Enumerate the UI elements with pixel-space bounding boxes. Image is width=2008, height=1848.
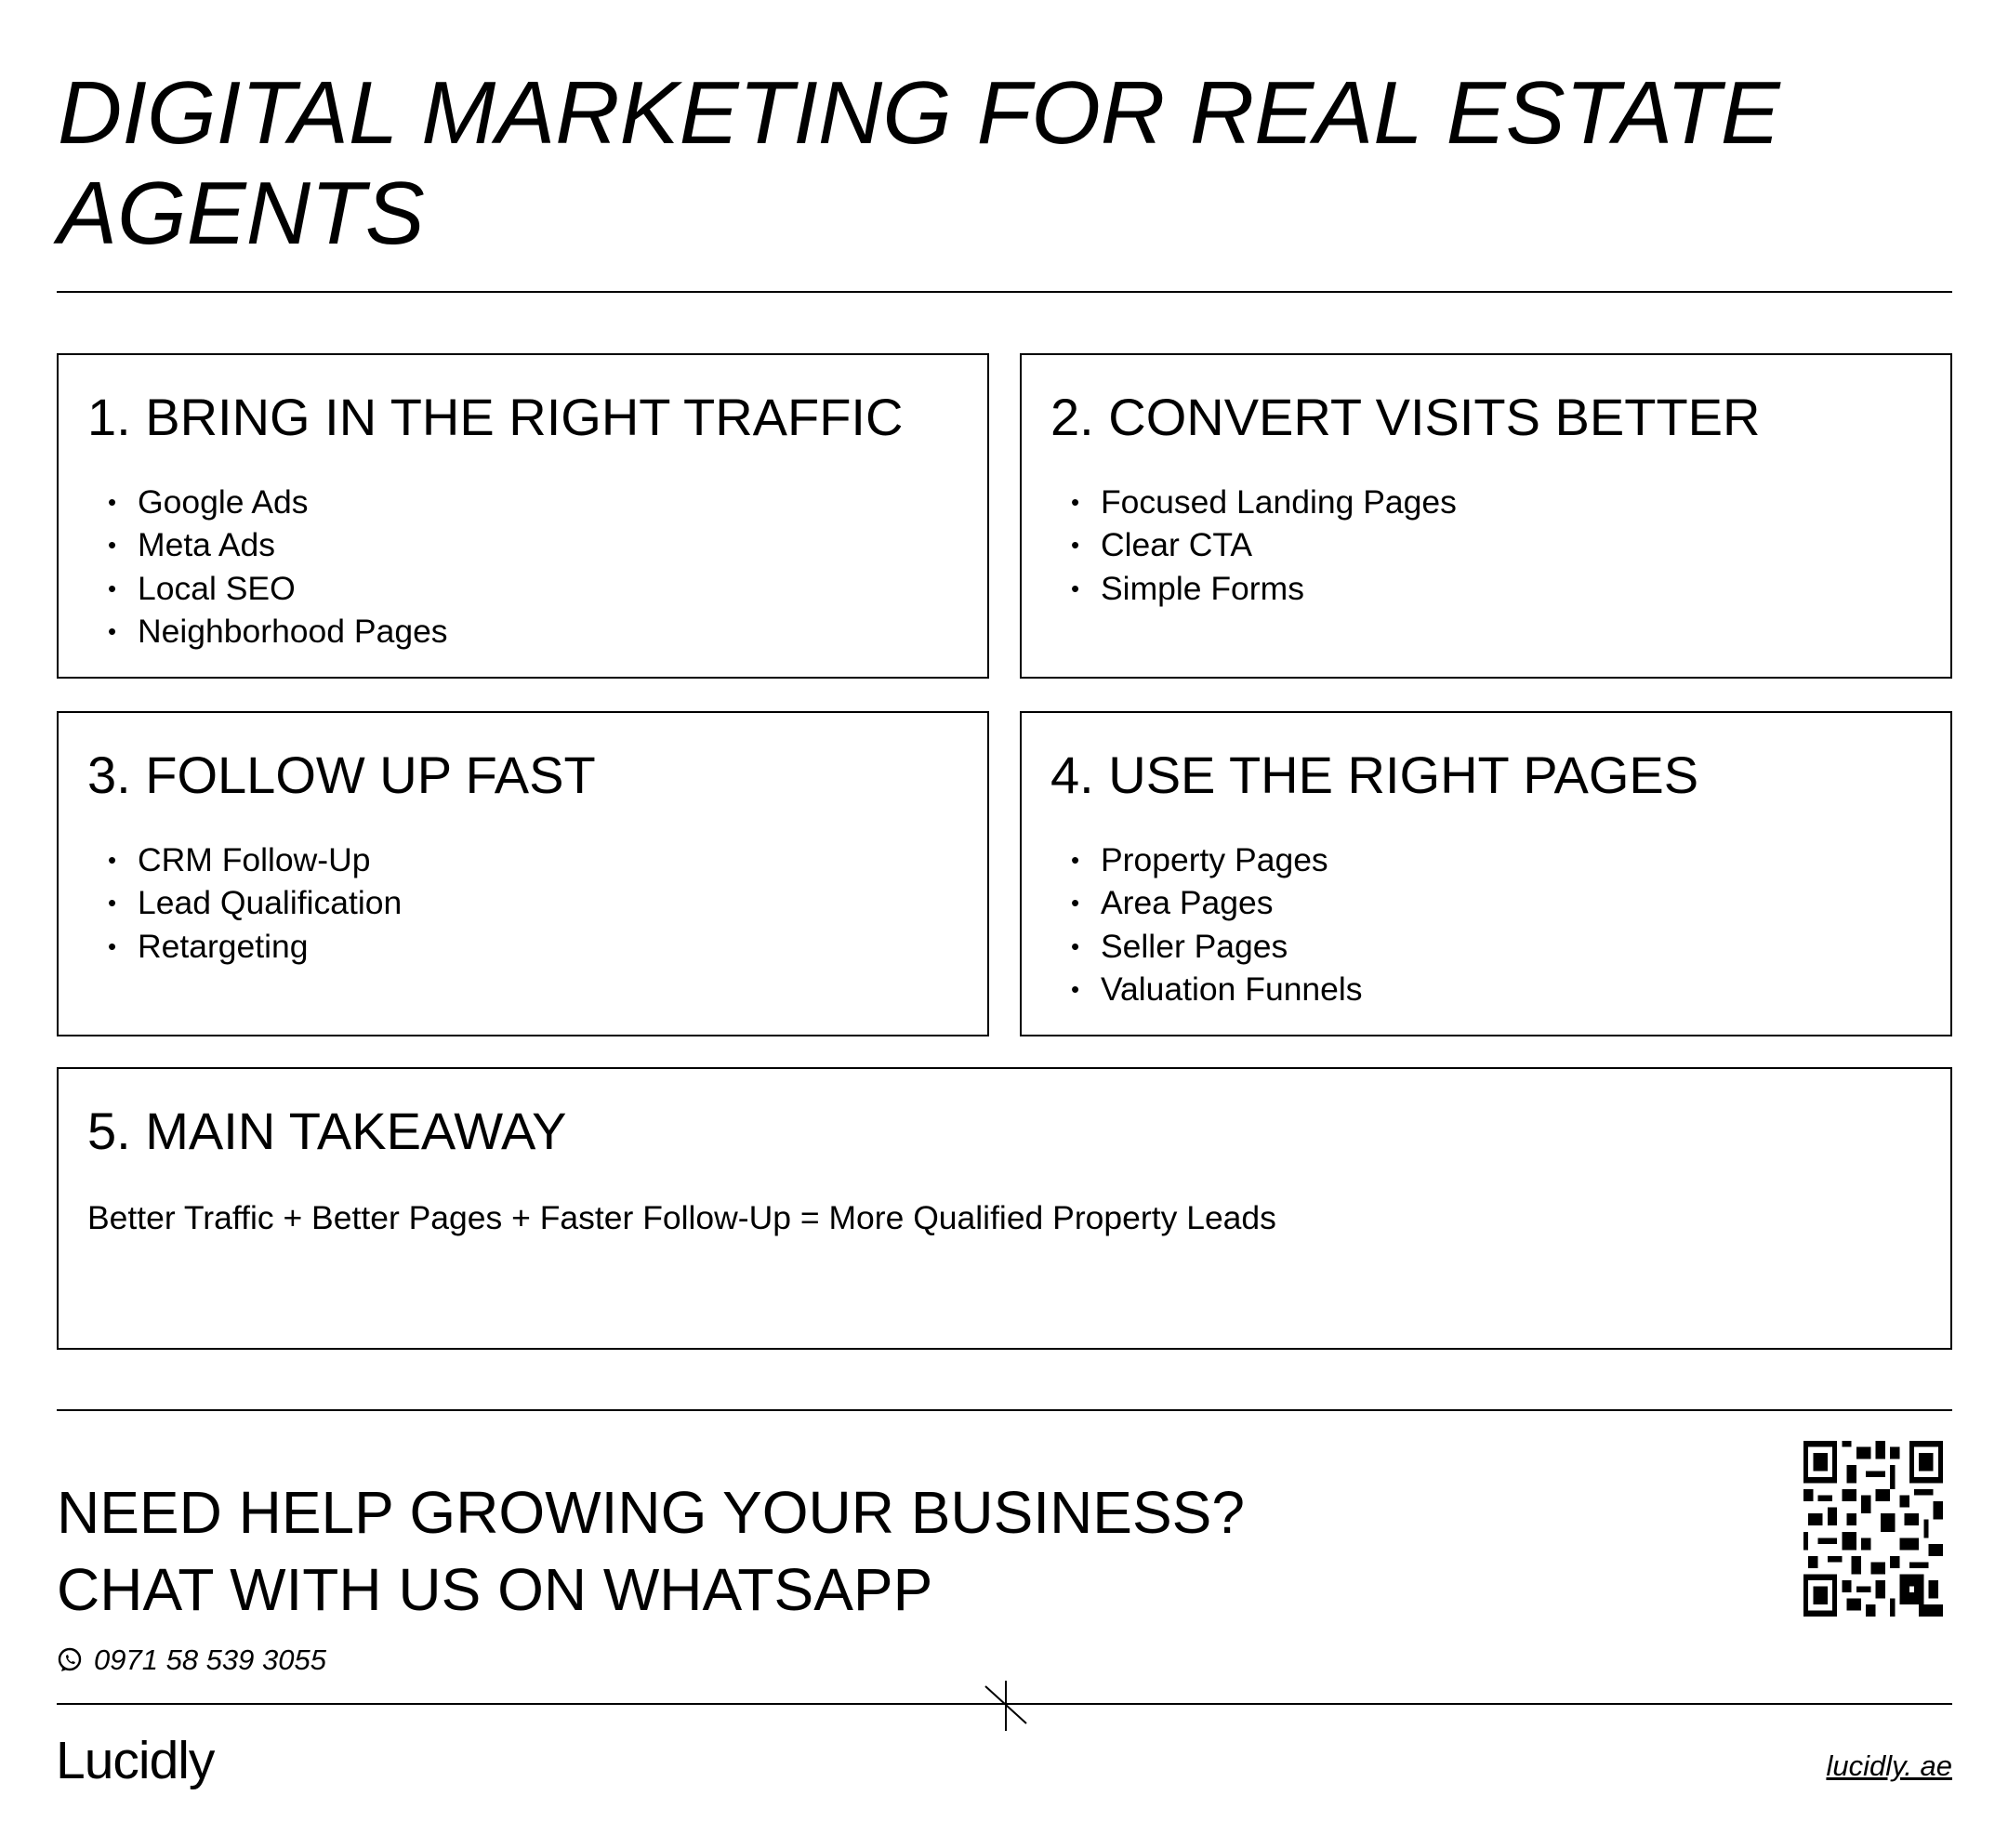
qr code: [1803, 1441, 1943, 1617]
logo: Lucidly: Lucidly: [56, 1731, 214, 1790]
heading 2: 2. CONVERT VISITS BETTER: [1050, 388, 1760, 446]
list 4: Property Pages: [1101, 841, 1328, 878]
website link: lucidly. ae: [1826, 1749, 1952, 1782]
panel: convert visits better: [1020, 353, 1952, 679]
list 2: [1072, 483, 1457, 607]
list 3: [109, 841, 402, 965]
cta heading: NEED HELP GROWING YOUR BUSINESS?: [57, 1479, 1245, 1546]
heading 5: 5. MAIN TAKEAWAY: [87, 1102, 567, 1160]
takeaway text: Better Traffic + Better Pages + Faster Follow-Up = More Qualified Property Leads: [87, 1199, 1276, 1236]
heading 3: 3. FOLLOW UP FAST: [87, 746, 596, 804]
title: AGENTS: [58, 164, 425, 263]
panel: follow up fast: [57, 711, 989, 1036]
icon: whatsapp: [58, 1647, 82, 1671]
list 3: CRM Follow-Up: [138, 841, 370, 878]
list 4: Area Pages: [1101, 884, 1274, 921]
cta heading: [57, 1479, 1245, 1623]
panel: main takeaway: [57, 1067, 1952, 1350]
list 3: Retargeting: [138, 928, 309, 965]
list 2: Focused Landing Pages: [1101, 483, 1457, 521]
list 4: Seller Pages: [1101, 928, 1288, 965]
list 4: Valuation Funnels: [1101, 970, 1363, 1008]
heading 4: 4. USE THE RIGHT PAGES: [1050, 746, 1698, 804]
panel: use the right pages: [1020, 711, 1952, 1036]
list 1: Google Ads: [138, 483, 309, 521]
cta heading: CHAT WITH US ON WHATSAPP: [57, 1556, 932, 1623]
list 2: Clear CTA: [1101, 526, 1252, 563]
list 4: [1072, 841, 1363, 1008]
icon: star mark: [984, 1681, 1027, 1731]
heading 1: 1. BRING IN THE RIGHT TRAFFIC: [87, 388, 903, 446]
list 3: Lead Qualification: [138, 884, 402, 921]
list 1: Local SEO: [138, 570, 296, 607]
title: DIGITAL MARKETING FOR REAL ESTATE: [58, 63, 1780, 163]
list 1: Neighborhood Pages: [138, 613, 448, 650]
list 1: Meta Ads: [138, 526, 275, 563]
list 1: [109, 483, 448, 650]
phone contact: 0971 58 539 3055: [94, 1643, 326, 1676]
title: [53, 63, 1781, 263]
list 2: Simple Forms: [1101, 570, 1304, 607]
panel: bring in the right traffic: [57, 353, 989, 679]
